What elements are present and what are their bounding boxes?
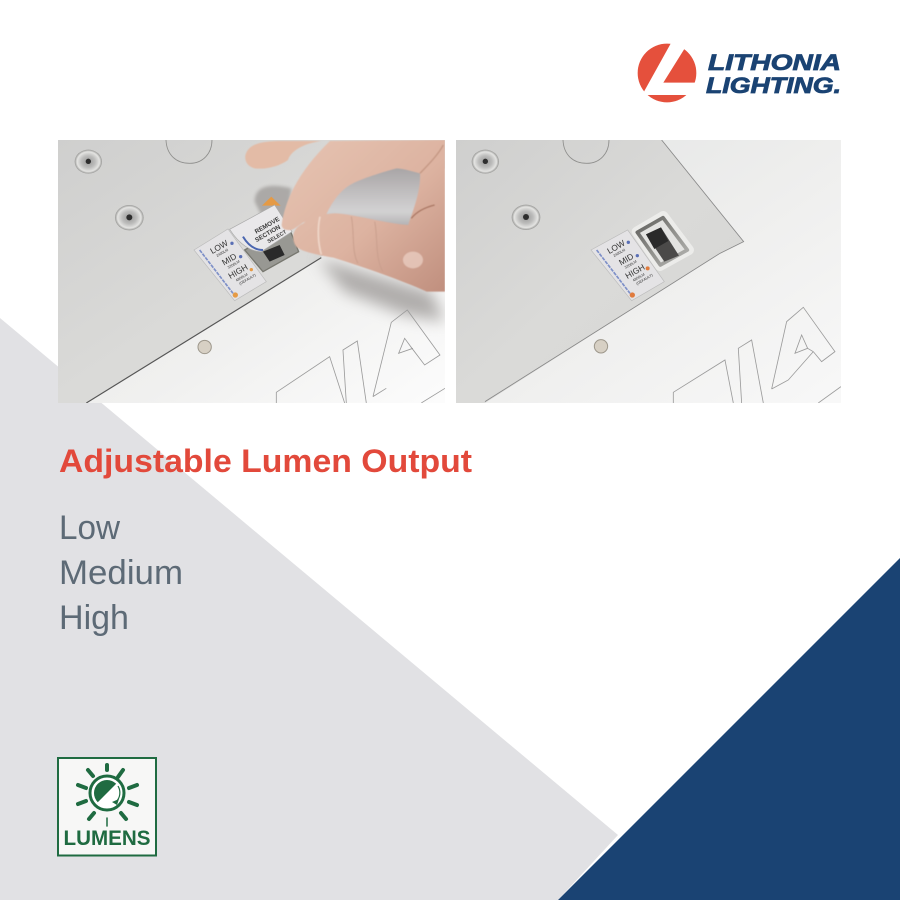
list of output levels: Low	[59, 509, 120, 547]
stamped letters	[673, 307, 841, 403]
switch recess	[245, 225, 299, 272]
gap between finger and thumb	[328, 168, 420, 226]
upper fingertip	[245, 141, 321, 169]
list of output levels: High	[59, 599, 129, 637]
printed label: HIGH	[623, 262, 646, 281]
peel-off sticker	[230, 205, 292, 252]
printed label: LOW	[208, 238, 230, 256]
rivets	[75, 150, 102, 174]
printed label	[591, 230, 664, 301]
printed label: 3200LM	[227, 260, 241, 270]
background: grey triangle	[0, 318, 618, 900]
shadow under hand	[318, 258, 445, 322]
small screw	[594, 340, 608, 353]
logo mark	[638, 41, 699, 102]
printed label: (DEFAULT)	[239, 273, 257, 286]
peel-off sticker: SELECT	[267, 229, 289, 245]
list of output levels	[59, 509, 183, 637]
shadow behind sticker	[255, 186, 291, 222]
peel-off sticker: REMOVE	[254, 216, 281, 236]
printed label: (DEFAULT)	[636, 273, 654, 286]
printed label: HIGH	[226, 262, 249, 281]
printed label: 3200LM	[624, 260, 638, 270]
icon: lumens badge	[58, 758, 156, 856]
circular knockout	[563, 140, 609, 163]
printed label: 4800LM	[632, 273, 645, 283]
printed label: 2400LM	[613, 248, 626, 258]
hand	[245, 140, 445, 292]
small screw	[198, 340, 211, 354]
logo wordmark: LIGHTING.	[706, 73, 841, 98]
logo wordmark	[706, 50, 841, 98]
metal plate	[456, 140, 744, 403]
peel-off sticker: SECTION	[254, 224, 282, 244]
sun rays	[78, 765, 137, 826]
background: navy triangle	[558, 558, 900, 900]
orange tab	[262, 197, 281, 206]
rivets	[472, 150, 499, 174]
printed label: LOW	[605, 238, 627, 256]
list of output levels: Medium	[59, 554, 183, 592]
badge label: LUMENS	[64, 827, 150, 850]
sun dial	[78, 765, 137, 826]
printed label: MID	[220, 251, 238, 267]
stamped letters	[276, 310, 445, 403]
photo: exposed lumen switch	[456, 140, 841, 403]
printed label	[194, 229, 266, 301]
logo wordmark: LITHONIA	[708, 50, 841, 75]
printed label: 4800LM	[235, 273, 248, 283]
heading: Adjustable Lumen Output	[59, 443, 472, 479]
photo: hand peeling label from switch	[58, 140, 445, 403]
metal plate	[58, 140, 445, 403]
switch housing	[637, 216, 689, 266]
circular knockout	[166, 140, 212, 163]
index finger, thumb and palm	[282, 140, 445, 292]
printed label: 2400LM	[216, 248, 229, 258]
printed label: MID	[617, 251, 635, 267]
logo: Lithonia Lighting	[638, 41, 841, 102]
